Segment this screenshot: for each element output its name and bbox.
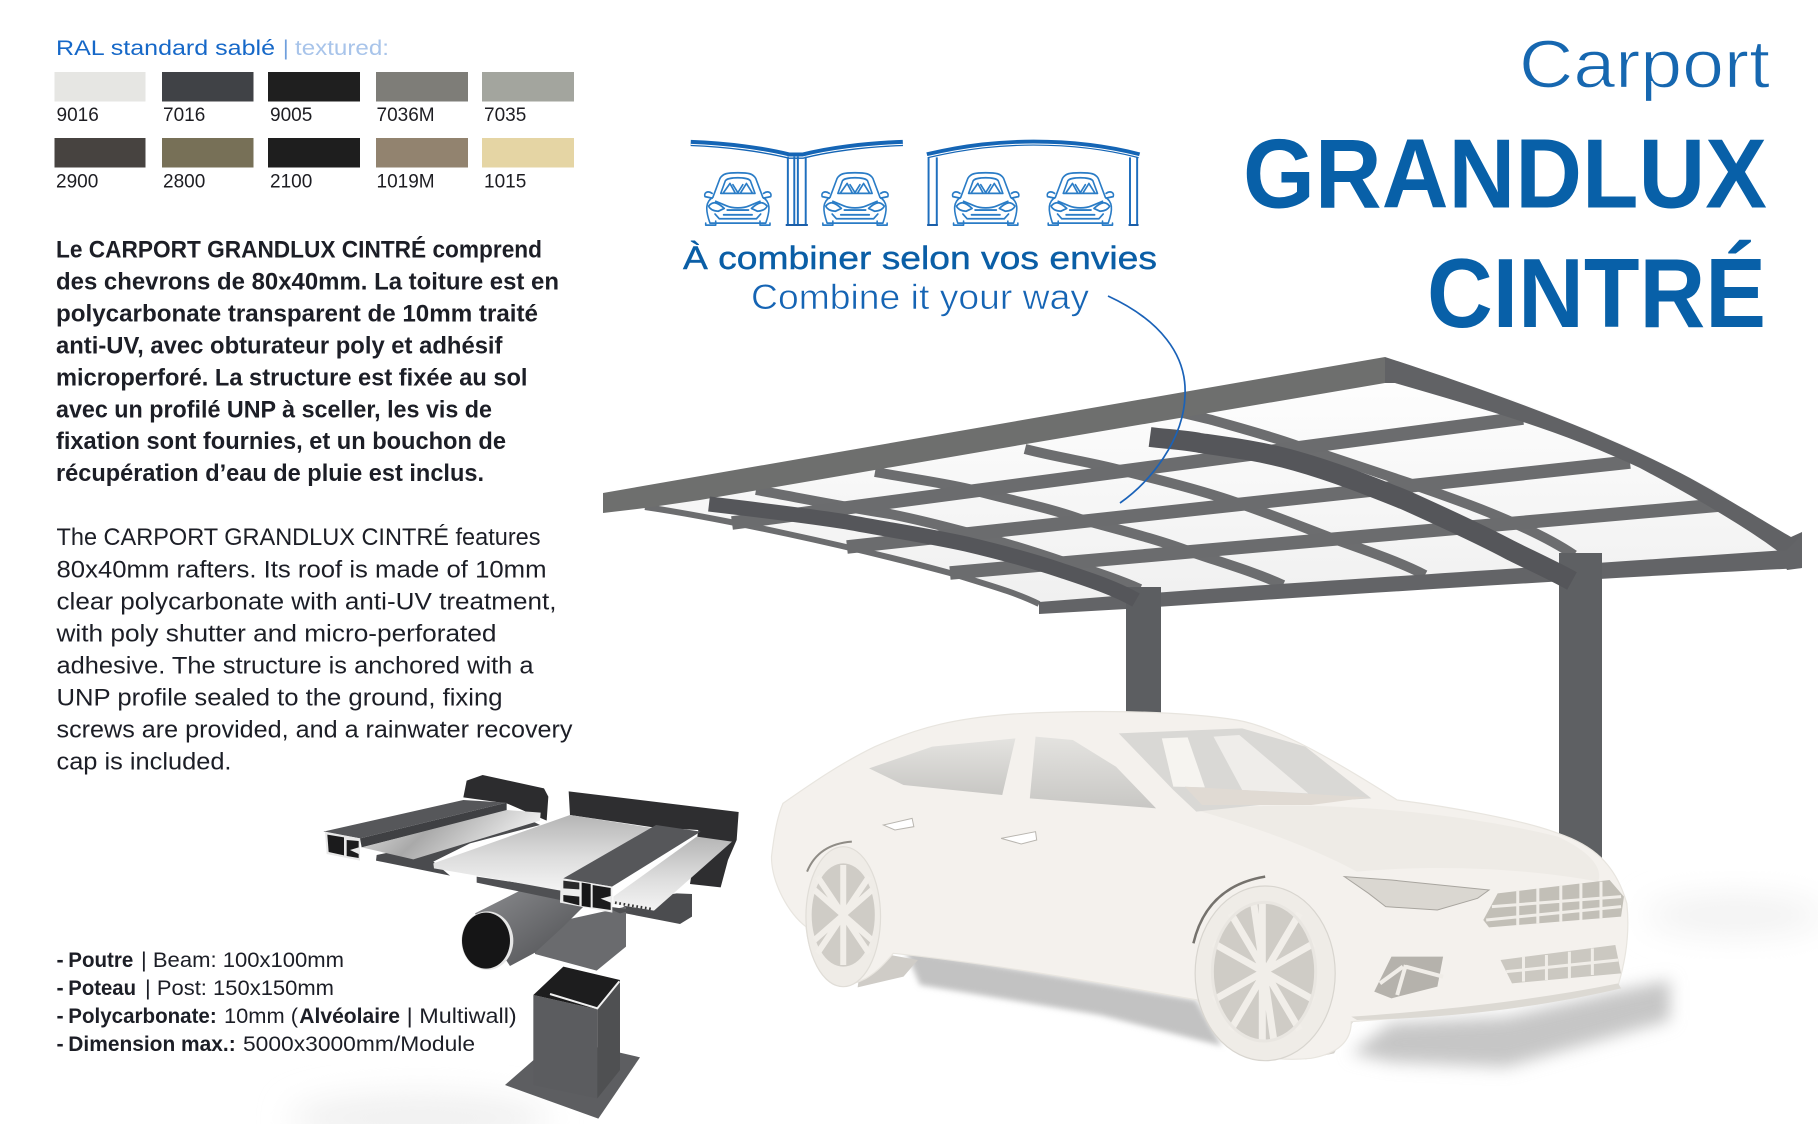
rear wheel (806, 842, 881, 987)
heading: RAL colours (56, 36, 389, 60)
text block: French description: des chevrons de 80x40mm. La toiture est en (56, 268, 559, 295)
swatch 9016 (54, 72, 146, 126)
swatch 7016 (162, 72, 254, 126)
headlight (1344, 877, 1489, 910)
front tyre tread (1305, 973, 1354, 1059)
left back fin (463, 775, 548, 821)
swatch 2100 (268, 138, 360, 192)
text block: French description: avec un profilé UNP à sceller, les vis de (56, 396, 492, 423)
text block: specifications: | Beam: 100x100mm (141, 948, 344, 972)
text block: French description: fixation sont fournies, et un bouchon de (56, 428, 506, 455)
left top rail (323, 800, 507, 838)
swatch 1019M: 1019M (376, 172, 435, 192)
swatch 2800: 2800 (163, 172, 205, 192)
door handles (883, 818, 1037, 844)
swatch 1019M (376, 138, 468, 192)
text block: specifications: 10mm ( (224, 1004, 299, 1028)
text block: English description: 80x40mm rafters. Its roof is made of 10mm (56, 556, 546, 583)
icon: Y-shaped carport (691, 143, 903, 225)
curved beam: left (709, 504, 1136, 600)
text block: English description: with poly shutter and micro-perforated (55, 620, 497, 647)
text block: specifications: - (56, 1004, 64, 1028)
title: GRANDLUX: GRANDLUX (1243, 119, 1767, 229)
left rail section (325, 832, 360, 861)
title: Carport: Carport (1519, 27, 1770, 103)
swatch 7036M (376, 72, 468, 126)
swatch 1015: 1015 (484, 172, 526, 192)
text block: French description: Le CARPORT GRANDLUX CINTRÉ comprend (56, 235, 542, 263)
centre multiwall panel (433, 815, 655, 891)
icon: car 1 (705, 173, 771, 225)
text block: French description: polycarbonate transparent de 10mm traité (56, 300, 538, 327)
swatch 1015 (482, 138, 574, 192)
heading: RAL colours: | (283, 36, 289, 60)
lower support bar (617, 893, 692, 924)
right multiwall panel (613, 837, 732, 911)
soft floor shadow under spec list (290, 1094, 550, 1124)
swatch 7035 (482, 72, 574, 126)
left clear panel (362, 810, 541, 859)
swatch 9016: 9016 (56, 105, 99, 126)
swatch 9005 (268, 72, 360, 126)
text block: French description: microperforé. La structure est fixée au sol (56, 364, 528, 391)
swatch 7035: 7035 (484, 105, 526, 126)
front wheel (1193, 877, 1335, 1061)
windshield (1119, 728, 1371, 812)
car body (771, 712, 1628, 1059)
centre dark underside (477, 877, 633, 913)
polycarbonate roof surface (645, 360, 1787, 602)
text block: specifications: | Multiwall) (407, 1004, 517, 1028)
icon: arched carport (927, 143, 1139, 225)
text block: specifications: - (56, 948, 64, 972)
front splitter (1351, 983, 1621, 1020)
text block: specifications (56, 948, 517, 1056)
post: left (1126, 587, 1161, 715)
text block: specifications: Poutre (68, 948, 133, 972)
swatch 7036M: 7036M (376, 105, 435, 126)
title (1243, 27, 1770, 348)
icon: car 3 (953, 173, 1019, 225)
fog lamp (1374, 957, 1443, 998)
centre rail section (560, 878, 612, 913)
upper grille (1483, 880, 1624, 927)
post (533, 967, 620, 1098)
rafters (645, 408, 1574, 604)
icon: car 4 (1047, 173, 1113, 225)
left lower underside (376, 822, 540, 876)
rear side window (869, 738, 1015, 795)
text block: specifications: - (56, 976, 64, 1000)
hood shading (1196, 806, 1599, 882)
lower grille (1501, 945, 1621, 983)
text block: specifications: Dimension max.: (68, 1032, 236, 1056)
rear tyre tread (858, 950, 918, 987)
ground shadows (905, 895, 1818, 1067)
swatch 9005: 9005 (270, 105, 312, 126)
caption: French: À combiner selon vos envies (683, 240, 1157, 276)
right back fin (569, 791, 739, 887)
round tube (461, 891, 587, 970)
text block: specifications: | Post: 150x150mm (145, 976, 334, 1000)
text block: specifications: Alvéolaire (299, 1004, 400, 1028)
text block: English description: UNP profile sealed to the ground, fixing (56, 684, 502, 711)
text block: French description: anti-UV, avec obturateur poly et adhésif (56, 332, 503, 359)
support box (535, 907, 626, 971)
text block: French description (56, 235, 559, 487)
curved beam: right (1150, 437, 1572, 581)
left rail side (360, 803, 507, 847)
text block: English description (55, 524, 573, 775)
text block: English description: screws are provided, and a rainwater recovery (56, 716, 573, 743)
swatch 2100: 2100 (270, 172, 312, 192)
panel: RAL swatches (54, 72, 574, 192)
heading: RAL colours: textured: (295, 36, 389, 60)
heading: RAL colours: RAL standard sablé (56, 36, 275, 60)
swatch 7016: 7016 (163, 105, 205, 126)
swatch 2900: 2900 (56, 172, 98, 192)
text block: specifications: - (56, 1032, 64, 1056)
post: right (1559, 553, 1602, 858)
swatch 2900 (54, 138, 146, 192)
centre rail top (563, 825, 701, 887)
text block: French description: récupération d’eau de pluie est inclus. (56, 460, 484, 487)
base plate (505, 1038, 640, 1119)
illustration: exploded structure detail (323, 775, 739, 1119)
text block: specifications: Polycarbonate: (68, 1004, 217, 1028)
purlins (732, 418, 1720, 573)
text block: English description: cap is included. (56, 748, 232, 775)
illustration: car (771, 712, 1628, 1061)
swatch 2800 (162, 138, 254, 192)
text block: specifications: Poteau (68, 976, 136, 1000)
text block: specifications: 5000x3000mm/Module (243, 1032, 475, 1056)
text block: English description: clear polycarbonate with anti-UV treatment, (56, 588, 556, 615)
front side window (1030, 737, 1156, 808)
eave beam (603, 357, 1385, 513)
caption: English: Combine it your way (751, 278, 1090, 317)
arrow: callout curve (1108, 296, 1185, 503)
title: CINTRÉ: CINTRÉ (1427, 238, 1766, 348)
icon: car 2 (822, 173, 888, 225)
icon: double carport combinations (691, 143, 1139, 225)
front gutter rail (1039, 535, 1802, 614)
text block: English description: adhesive. The structure is anchored with a (56, 652, 534, 679)
right curved rim (1385, 357, 1802, 570)
illustration: carport (603, 357, 1802, 858)
text block: English description: The CARPORT GRANDLUX CINTRÉ features (56, 524, 540, 551)
